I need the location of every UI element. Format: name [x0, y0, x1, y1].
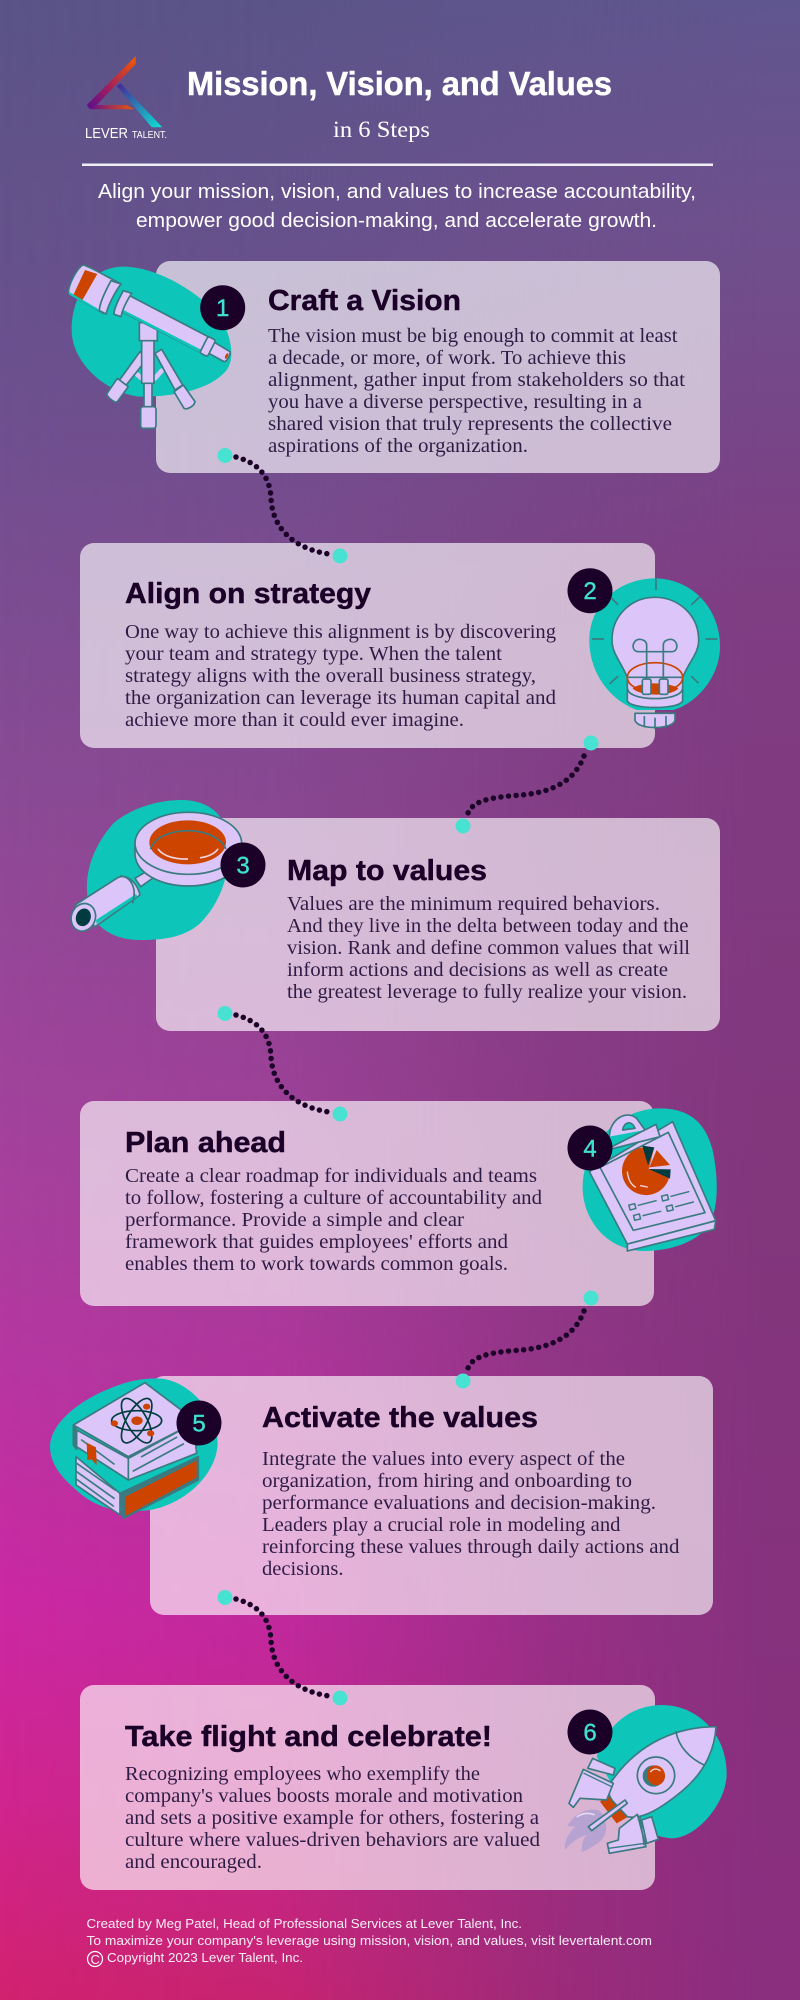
- icon: rocket: [565, 1705, 727, 1853]
- connector: step 3 to 4: [218, 1006, 348, 1122]
- body: step 5: organization, from hiring and onboarding to: [262, 1470, 632, 1492]
- body: step 1: alignment, gather input from stakeholders so that: [268, 369, 685, 391]
- panel: step 4 card: [80, 1101, 654, 1306]
- number badge 3: 3: [236, 852, 250, 880]
- heading: Align on strategy: Align on strategy: [125, 578, 371, 610]
- intro text: Align your mission, vision, and values to increase accountability,: [98, 181, 696, 203]
- icon: copyright circle: C: [90, 1952, 100, 1967]
- icon: light bulb: [589, 578, 720, 728]
- body: step 6: and encouraged.: [125, 1851, 262, 1873]
- body: step 3: inform actions and decisions as well as create: [287, 959, 668, 981]
- body: step 5: performance evaluations and decision-making.: [262, 1492, 656, 1514]
- body: step 6: [125, 1763, 540, 1873]
- number badge 1: 1: [216, 295, 229, 322]
- icon: telescope: [68, 265, 231, 428]
- body: step 3: the greatest leverage to fully realize your vision.: [287, 981, 687, 1003]
- body: step 2: [125, 621, 556, 731]
- body: step 2: One way to achieve this alignment is by discovering: [125, 621, 556, 643]
- body: step 1: a decade, or more, of work. To achieve this: [268, 347, 626, 369]
- body: step 5: reinforcing these values through daily actions and: [262, 1536, 680, 1558]
- panel: step 5 card: [150, 1376, 713, 1615]
- logo: Lever Talent: LEVER: [85, 126, 128, 142]
- body: step 1: shared vision that truly represents the collective: [268, 413, 672, 435]
- body: step 4: [125, 1165, 542, 1275]
- heading: Craft a Vision: Craft a Vision: [268, 285, 461, 317]
- body: step 3: [287, 893, 690, 1003]
- number badge 5: [176, 1400, 222, 1446]
- body: step 3: And they live in the delta between today and the: [287, 915, 688, 937]
- number badge 2: 2: [583, 578, 597, 605]
- heading: Plan ahead: Plan ahead: [125, 1127, 286, 1159]
- heading: Take flight and celebrate!: Take flight and celebrate!: [125, 1721, 492, 1753]
- body: step 1: The vision must be big enough to commit at least: [268, 325, 678, 347]
- body: step 6: company's values boosts morale and motivation: [125, 1785, 523, 1807]
- footer credits: Copyright 2023 Lever Talent, Inc.: [107, 1950, 303, 1965]
- logo: Lever Talent: [85, 56, 167, 142]
- footer credits: To maximize your company's leverage using mission, vision, and values, visit levertalent.com: [86, 1933, 652, 1948]
- title: Mission, Vision, and Values: [187, 65, 612, 102]
- connector: step 5 to 6: [218, 1590, 348, 1706]
- footer credits: [86, 1916, 652, 1967]
- icon: magnifying glass: [67, 800, 242, 940]
- subtitle: in 6 Steps: in 6 Steps: [333, 117, 430, 142]
- body: step 6: culture where values-driven behaviors are valued: [125, 1829, 540, 1851]
- body: step 2: strategy aligns with the overall business strategy,: [125, 665, 536, 687]
- body: step 3: Values are the minimum required behaviors.: [287, 893, 660, 915]
- body: step 1: aspirations of the organization.: [268, 435, 528, 457]
- body: step 1: [268, 325, 685, 457]
- number badge 6: [568, 1710, 612, 1754]
- body: step 2: achieve more than it could ever imagine.: [125, 709, 464, 731]
- panel: step 1 card: [156, 261, 720, 473]
- footer credits: Created by Meg Patel, Head of Professional Services at Lever Talent, Inc.: [86, 1916, 522, 1931]
- panel: step 6 card: [80, 1685, 655, 1890]
- logo: Lever Talent: TALENT.: [132, 130, 167, 141]
- intro text: empower good decision-making, and accelerate growth.: [136, 210, 657, 232]
- number badge 4: [568, 1126, 612, 1170]
- number badge 1: [200, 285, 245, 330]
- body: step 6: Recognizing employees who exemplify the: [125, 1763, 480, 1785]
- icon: copyright circle: [88, 1952, 102, 1967]
- connector: step 4 to 5: [456, 1290, 598, 1388]
- icon: clipboard with pie chart: [583, 1108, 717, 1251]
- body: step 4: enables them to work towards common goals.: [125, 1253, 508, 1275]
- number badge 4: 4: [583, 1136, 597, 1162]
- connector: step 1 to 2: [218, 448, 348, 564]
- intro text: [98, 181, 696, 232]
- body: step 6: and sets a positive example for others, fostering a: [125, 1807, 539, 1829]
- body: step 5: decisions.: [262, 1558, 344, 1580]
- number badge 6: 6: [583, 1720, 597, 1746]
- icon: stacked books with atom: [50, 1378, 218, 1518]
- body: step 4: to follow, fostering a culture of accountability and: [125, 1187, 542, 1209]
- heading: Map to values: Map to values: [287, 855, 487, 887]
- body: step 2: your team and strategy type. When the talent: [125, 643, 502, 665]
- connector: step 2 to 3: [456, 736, 598, 834]
- body: step 4: Create a clear roadmap for individuals and teams: [125, 1165, 537, 1187]
- number badge 2: [568, 568, 612, 613]
- body: step 5: Integrate the values into every aspect of the: [262, 1448, 625, 1470]
- panel: step 2 card: [80, 543, 655, 748]
- body: step 2: the organization can leverage its human capital and: [125, 687, 556, 709]
- body: step 3: vision. Rank and define common values that will: [287, 937, 690, 959]
- body: step 4: performance. Provide a simple and clear: [125, 1209, 464, 1231]
- body: step 1: you have a diverse perspective, resulting in a: [268, 391, 642, 413]
- number badge 3: [220, 842, 266, 888]
- body: step 5: [262, 1448, 680, 1580]
- panel: step 3 card: [156, 818, 720, 1031]
- number badge 5: 5: [192, 1410, 206, 1438]
- body: step 5: Leaders play a crucial role in modeling and: [262, 1514, 620, 1536]
- heading: Activate the values: Activate the values: [262, 1402, 538, 1434]
- body: step 4: framework that guides employees' efforts and: [125, 1231, 508, 1253]
